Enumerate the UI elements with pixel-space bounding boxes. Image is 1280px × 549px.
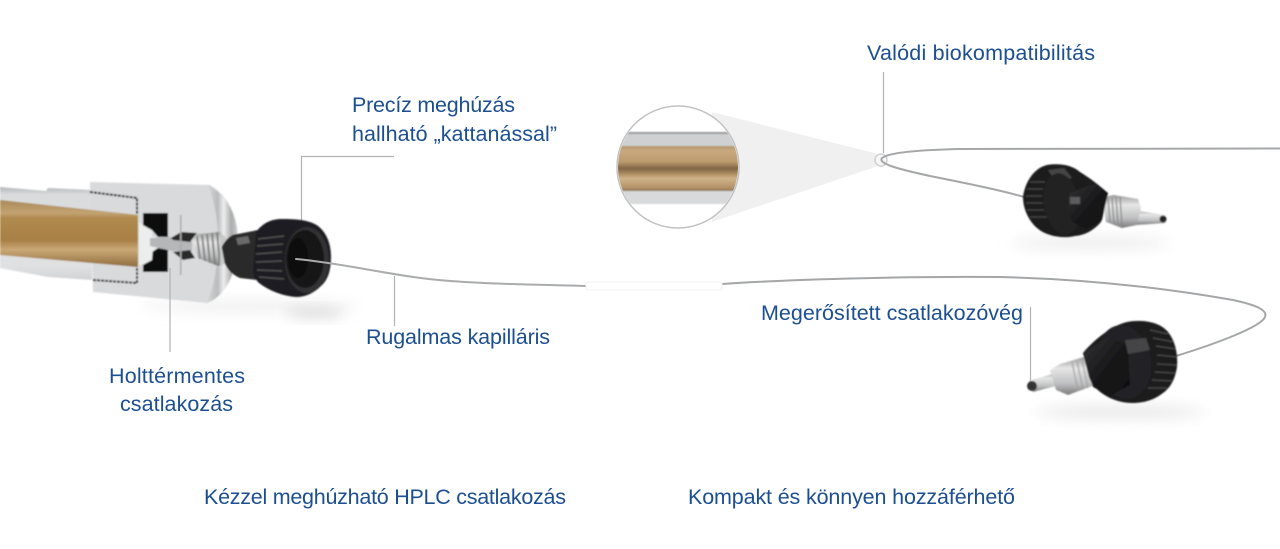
inner ferrule [139, 222, 190, 266]
main nut [222, 219, 331, 297]
magnifier lens [610, 106, 887, 228]
label: Holttérmentes csatlakozás: Holttérmentes [109, 364, 245, 388]
magnifier cone [712, 112, 878, 222]
label: Megerősített csatlakozóvég: Megerősített csatlakozóvég [761, 301, 1023, 325]
silver thread [1102, 195, 1141, 228]
neck [222, 230, 258, 280]
leader lines [170, 72, 1030, 382]
metal housing [90, 182, 237, 303]
thread lines [90, 192, 137, 283]
capillary [296, 259, 1265, 356]
housing rim highlight [207, 185, 237, 303]
caption: Kompakt és könnyen hozzáférhető: Kompakt és könnyen hozzáférhető [688, 485, 1015, 509]
label: Valódi biokompatibilitás: Valódi biokompatibilitás [867, 41, 1095, 65]
column tube [0, 187, 92, 280]
thread [192, 232, 228, 266]
brown column core [0, 200, 138, 267]
front opening [285, 227, 329, 293]
label: Precíz meghúzás hallható kattanással [352, 93, 557, 146]
nut body [1083, 321, 1177, 403]
label: Holttérmentes csatlakozás [109, 364, 245, 416]
black cavity [143, 213, 168, 237]
knurled body [253, 219, 331, 297]
tip [1031, 372, 1063, 392]
column and fitting cross-section [0, 182, 237, 303]
label: Holttérmentes csatlakozás: csatlakozás [120, 392, 233, 416]
upper capillary [881, 148, 1280, 197]
nut body [1023, 164, 1108, 237]
leader: Precíz meghúzás [302, 156, 394, 222]
tip [1132, 210, 1166, 225]
lower nut with tip [1027, 321, 1177, 403]
reinforced sleeve [586, 282, 722, 290]
label: Precíz meghúzás hallható kattanással: Precíz meghúzás [352, 93, 515, 117]
label: Precíz meghúzás hallható kattanással: hallható „kattanással” [352, 122, 557, 146]
silver thread [1050, 357, 1095, 395]
label: Rugalmas kapilláris: Rugalmas kapilláris [366, 325, 550, 349]
caption: Kézzel meghúzható HPLC csatlakozás: Kézzel meghúzható HPLC csatlakozás [204, 485, 566, 509]
soft shadows [140, 238, 1205, 418]
upper nut with tip [1023, 164, 1166, 238]
